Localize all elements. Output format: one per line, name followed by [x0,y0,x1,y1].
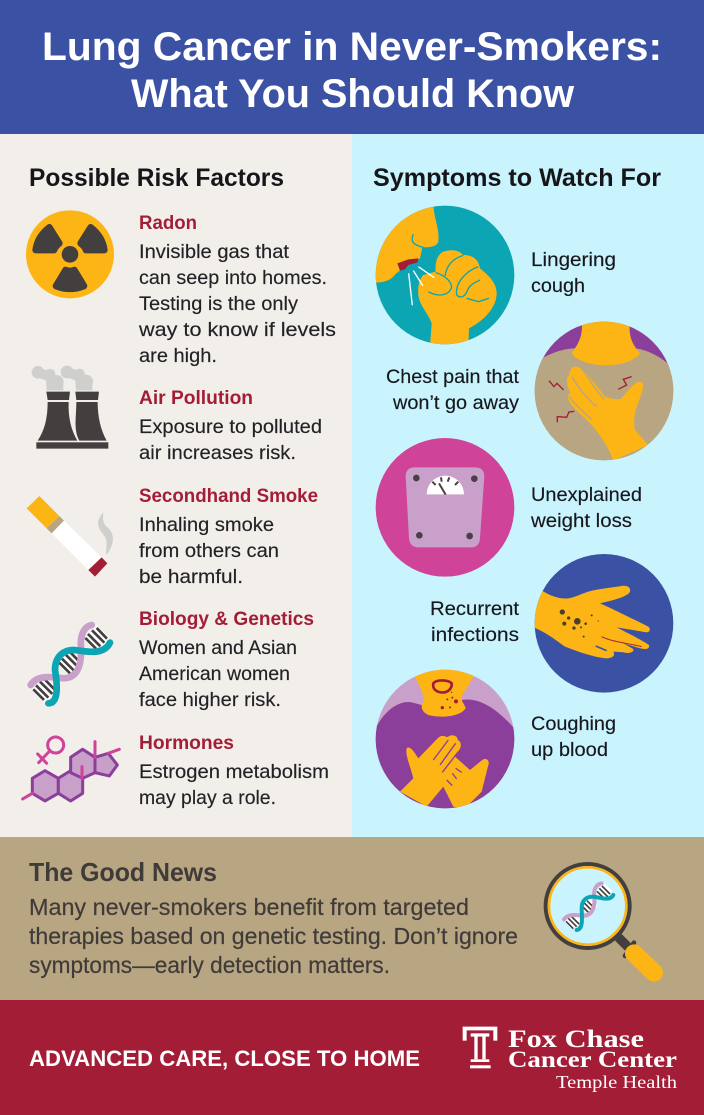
text: air pollution: Air Pollution [139,388,253,409]
text: secondhand smoke: Inhaling smoke [139,514,274,536]
text: secondhand smoke: Secondhand Smoke [139,486,318,507]
text: air pollution: Exposure to polluted [139,416,322,438]
text: biology and genetics: American women [139,663,290,685]
text: radon: can seep into homes. [139,267,327,289]
icon: cooling towers [32,366,108,449]
text: secondhand smoke: be harmful. [139,566,243,588]
text: hormones [139,733,329,809]
text: air pollution: air increases risk. [139,442,296,464]
title [42,25,662,116]
icon: coughing up blood [372,668,518,812]
tagline: ADVANCED CARE, CLOSE TO HOME [29,1046,420,1071]
footer band [0,1000,704,1115]
text: recurrent infections: infections [431,624,519,646]
icon: dna helix [31,625,110,703]
panel: symptoms to watch for [352,134,704,837]
icon: chest pain [534,322,674,460]
icon: hand with infection spots [532,554,673,693]
logo: fox chase cancer center wordmark: Cancer Center [508,1047,677,1072]
logo: fox chase cancer center wordmark: Temple Health [556,1072,677,1092]
icon: weight scale [376,438,514,577]
text: radon: way to know if levels [138,319,336,341]
text: hormones: Hormones [139,733,234,754]
panel: possible risk factors [0,134,352,837]
logo: fox chase cancer center wordmark: Fox Chase [508,1026,644,1053]
text: good news body [29,894,518,978]
header banner [0,0,704,134]
icon: magnifying glass with dna [546,864,654,973]
text: radon [138,213,336,367]
text: recurrent infections [430,598,520,646]
icon: hormone molecule [23,737,119,801]
text: good news body: Many never-smokers benefit from targeted [29,894,469,920]
text: lingering cough: cough [531,275,585,297]
text: lingering cough [531,249,616,297]
text: secondhand smoke: from others can [139,540,279,562]
icon: cigarette [27,496,113,577]
text: biology and genetics: Women and Asian [139,637,297,659]
text: biology and genetics: face higher risk. [139,689,281,711]
text: air pollution [139,388,322,464]
text: radon: Radon [139,213,197,234]
text: biology and genetics [139,609,314,711]
panel: the good news [0,837,704,1000]
text: coughing up blood: Coughing [531,713,616,735]
text: chest pain [386,366,520,414]
text: coughing up blood [531,713,616,761]
icon: lingering cough [372,203,514,347]
text: chest pain: Chest pain that [386,366,520,388]
text: good news body: therapies based on genetic testing. Don’t ignore [29,923,518,949]
text: coughing up blood: up blood [531,739,608,761]
text: lingering cough: Lingering [531,249,616,271]
text: weight loss: Unexplained [531,484,642,506]
text: radon: are high. [139,345,217,367]
text: radon: Testing is the only [139,293,298,315]
text: hormones: may play a role. [139,787,276,809]
icon: radiation symbol [26,210,114,298]
text: hormones: Estrogen metabolism [139,761,329,783]
title: Lung Cancer in Never-Smokers: [42,25,662,69]
heading: symptoms to watch for: Symptoms to Watch For [373,164,661,192]
text: weight loss: weight loss [530,510,632,532]
text: secondhand smoke [139,486,318,588]
text: good news body: symptoms—early detection matters. [29,952,390,978]
heading: possible risk factors: Possible Risk Factors [29,164,284,192]
text: radon: Invisible gas that [139,241,290,263]
title: What You Should Know [131,72,575,116]
logo: temple T mark [463,1027,497,1068]
text: chest pain: won’t go away [392,392,519,414]
logo: fox chase cancer center wordmark [508,1026,677,1092]
text: recurrent infections: Recurrent [430,598,520,620]
text: weight loss [530,484,642,532]
text: biology and genetics: Biology & Genetics [139,609,314,630]
heading: the good news: The Good News [29,857,217,887]
